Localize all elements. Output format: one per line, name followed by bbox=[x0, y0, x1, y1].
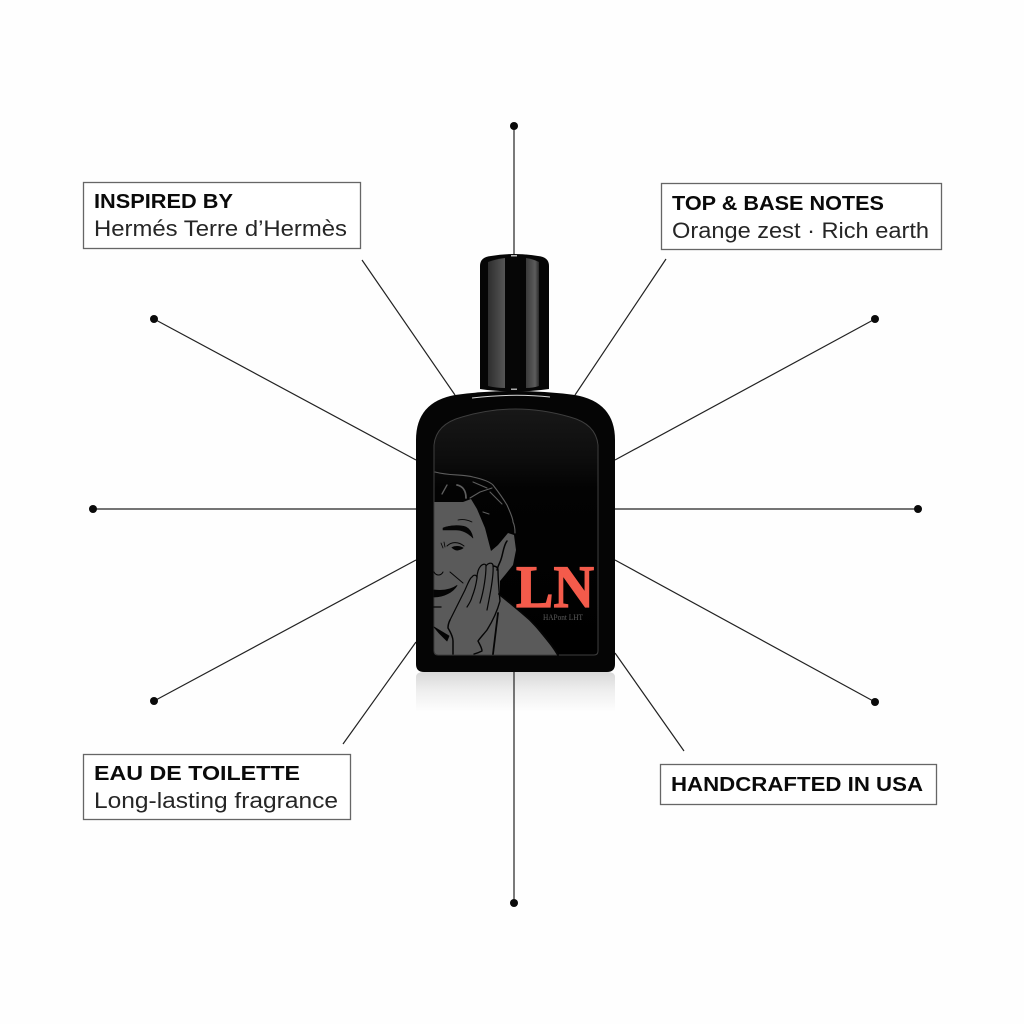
callout connector lines bbox=[343, 259, 684, 751]
callout: inspired by bbox=[84, 182, 360, 248]
callout: inspired by: Hermés Terre d’Hermès bbox=[94, 216, 347, 241]
bottle body bbox=[416, 391, 615, 672]
callout: top and base notes bbox=[662, 184, 942, 250]
facial features and hand linework bbox=[434, 520, 558, 655]
callout: inspired by: INSPIRED BY bbox=[94, 190, 233, 213]
callout: handcrafted in USA bbox=[660, 764, 936, 804]
shoulder highlight bbox=[472, 395, 550, 398]
bottle cap bbox=[480, 254, 549, 392]
label illustration: man touching his cheek bbox=[434, 472, 558, 655]
callout: eau de toilette: Long-lasting fragrance bbox=[94, 788, 338, 813]
label brand mark LN: HAPont LHT bbox=[543, 613, 583, 622]
hair outline and streaks bbox=[435, 472, 515, 533]
callout: top and base notes: TOP & BASE NOTES bbox=[672, 192, 884, 215]
callout: handcrafted in USA: HANDCRAFTED IN USA bbox=[671, 773, 923, 796]
callout: eau de toilette bbox=[84, 754, 350, 820]
bottle label panel bbox=[434, 409, 598, 655]
bottle bbox=[416, 254, 615, 672]
radial leader lines with end dots bbox=[89, 122, 922, 907]
callout: eau de toilette: EAU DE TOILETTE bbox=[94, 762, 300, 785]
bottle reflection bbox=[416, 672, 615, 712]
label brand mark LN: LN bbox=[516, 554, 594, 620]
callout: top and base notes: Orange zest · Rich earth bbox=[672, 218, 929, 243]
